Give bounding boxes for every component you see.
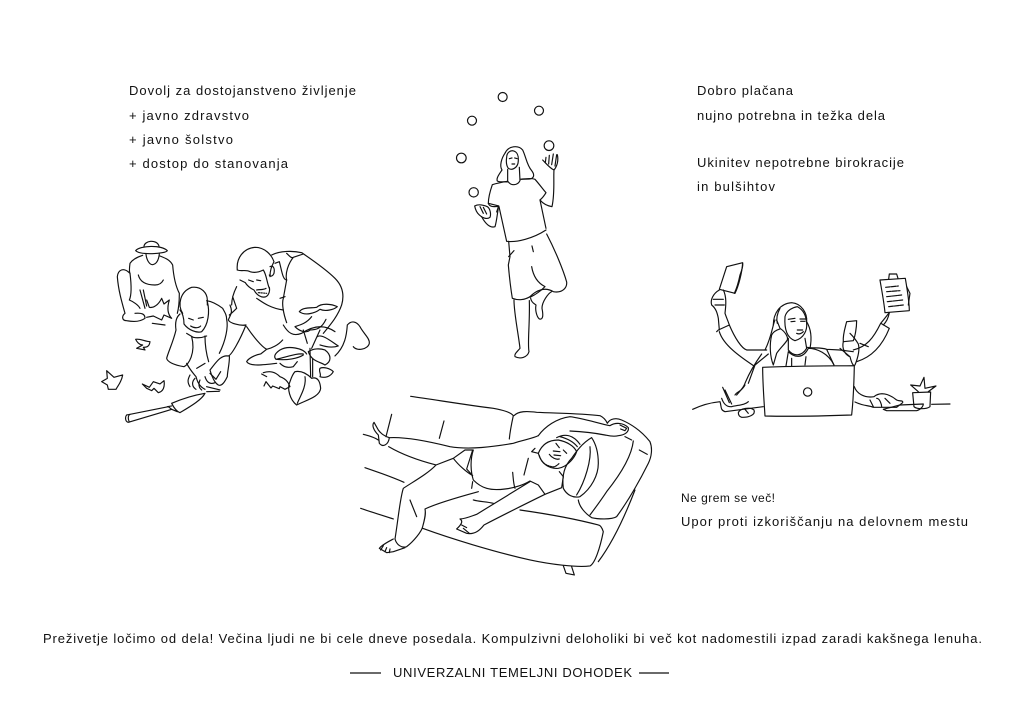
sofa	[361, 396, 651, 575]
text block: decent life and public services: + dostop do stanovanja	[129, 156, 289, 171]
text block: decent life and public services: + javno zdravstvo	[129, 108, 249, 123]
leaves on the ground	[102, 339, 164, 393]
text block: decent life and public services	[129, 83, 356, 171]
illustration: gardeners	[102, 241, 369, 422]
man: raised arm	[538, 417, 628, 436]
figure: person with hat in the background	[117, 241, 179, 325]
potted plant	[911, 377, 950, 409]
text block: well-paid necessary work: in bulšihtov	[697, 179, 776, 194]
bottom statement: Preživetje ločimo od dela! Večina ljudi ne bi cele dneve posedala. Kompulzivni deloholiki bi več kot nadomestili izpad zaradi kakšnega lenuha.	[43, 631, 982, 646]
man: head	[538, 435, 580, 468]
man: torso and lower arm	[389, 436, 563, 534]
text block: well-paid necessary work: Dobro plačana	[697, 83, 794, 98]
illustration: man resting on sofa	[361, 396, 651, 575]
lower right hand with mouse and calculator	[854, 387, 923, 411]
figure: older man with plant	[210, 247, 369, 389]
text block: decent life and public services: + javno šolstvo	[129, 132, 233, 147]
phone and hands	[737, 320, 868, 395]
text block: well-paid necessary work: Ukinitev nepotrebne birokracije	[697, 155, 904, 170]
laptop	[763, 366, 854, 416]
illustration: overworked woman multitasking	[693, 263, 950, 417]
text block: decent life and public services: Dovolj za dostojanstveno življenje	[129, 83, 356, 98]
illustration: juggler	[456, 92, 567, 358]
text block: well-paid necessary work: nujno potrebna in težka dela	[697, 108, 886, 123]
text block: resistance to exploitation: Ne grem se več!	[681, 491, 775, 505]
figure: child planting	[167, 287, 227, 392]
upper arms	[711, 290, 889, 366]
text block: resistance to exploitation: Upor proti izkoriščanju na delovnem mestu	[681, 514, 968, 529]
pillow	[563, 438, 598, 497]
book	[719, 263, 743, 293]
text block: well-paid necessary work	[697, 83, 904, 194]
trowel	[126, 393, 205, 422]
clipboard	[880, 274, 910, 313]
text block: resistance to exploitation	[681, 491, 968, 529]
closing title: universal basic income: UNIVERZALNI TEMELJNI DOHODEK	[393, 665, 632, 680]
woman: head and hair	[765, 303, 811, 355]
plant	[275, 304, 338, 405]
man: legs and feet	[373, 422, 478, 553]
lower left hand with pen, notebook and mouse	[693, 385, 763, 417]
